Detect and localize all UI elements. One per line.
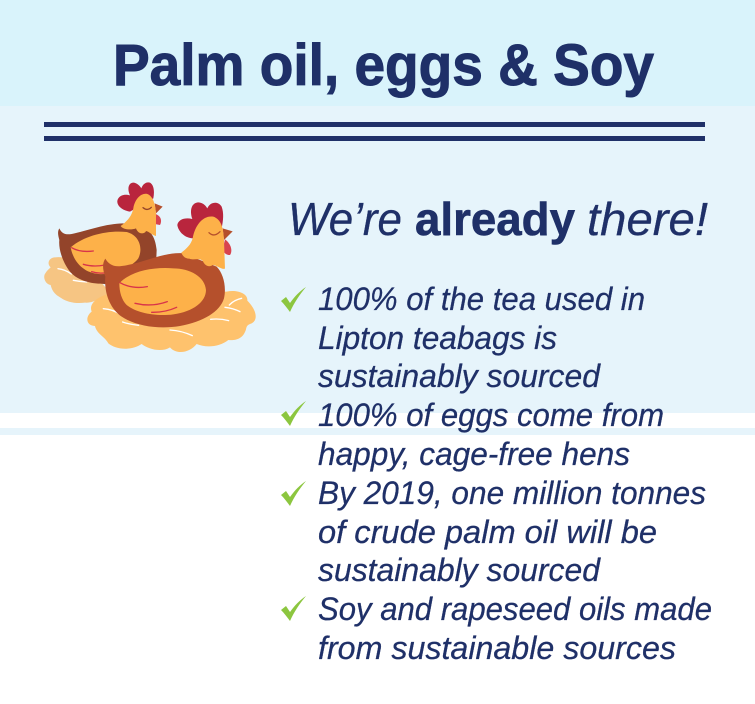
back hen comb: [117, 182, 154, 212]
back hen beak: [155, 203, 163, 213]
list item 1: [281, 281, 645, 394]
front hen neck: [181, 216, 225, 269]
list item 1: Lipton teabags is: [318, 320, 557, 356]
list item 3: of crude palm oil will be: [318, 514, 657, 550]
list item 4: Soy and rapeseed oils made: [318, 591, 712, 627]
list item 2: happy, cage-free hens: [318, 436, 630, 472]
list item 2: 100% of eggs come from: [318, 397, 664, 433]
icon: two hens on nests: [44, 182, 256, 352]
subheading: [288, 193, 708, 245]
subheading: We’re: [288, 193, 402, 245]
back hen neck: [121, 194, 156, 236]
front hen wattle: [223, 239, 231, 255]
list item 1: sustainably sourced: [318, 358, 601, 394]
front hen body: [103, 253, 225, 327]
back hen body: [58, 223, 157, 284]
header band: [0, 0, 755, 106]
list item 1: 100% of the tea used in: [318, 281, 645, 317]
check list: [281, 281, 712, 666]
list item 2: [281, 397, 664, 472]
subheading: already: [415, 193, 575, 245]
back nest: [44, 257, 112, 303]
subheading: there!: [587, 193, 708, 245]
list item 3: sustainably sourced: [318, 552, 601, 588]
back hen wattle: [155, 214, 161, 225]
list item 3: By 2019, one million tonnes: [318, 475, 706, 511]
double divider: [44, 122, 705, 141]
front nest: [87, 291, 256, 352]
list item 4: [281, 591, 712, 666]
list item 3: [281, 475, 706, 588]
list item 4: from sustainable sources: [318, 630, 676, 666]
front hen comb: [177, 202, 223, 238]
front hen beak: [223, 228, 233, 240]
title: Palm oil, eggs & Soy: [113, 33, 654, 98]
